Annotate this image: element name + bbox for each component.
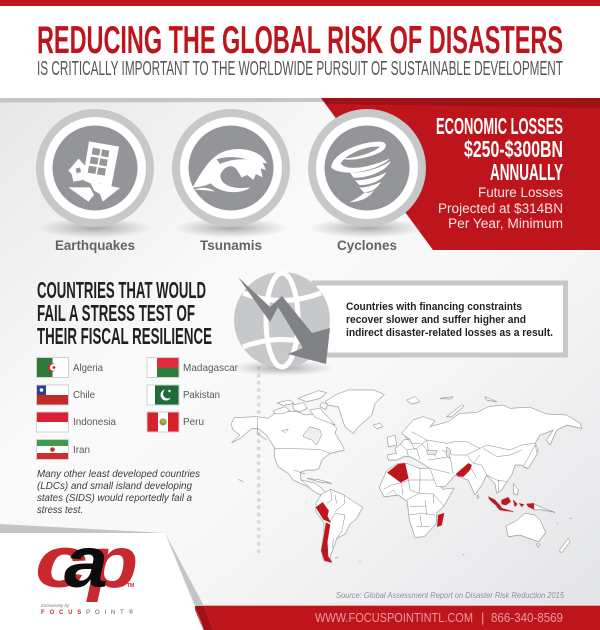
svalbard and russian arctic [407, 397, 497, 417]
dark red band [321, 98, 600, 108]
icon: globe with falling arrow [234, 272, 330, 368]
black and caspian seas [427, 447, 451, 458]
cuba [307, 478, 332, 483]
chile [321, 523, 332, 562]
label: tsunamis: Tsunamis [200, 237, 262, 253]
losses projection text: Future Losses [478, 185, 563, 200]
japan [523, 445, 537, 468]
world map [231, 390, 582, 562]
label: earthquakes: Earthquakes [55, 237, 135, 253]
logo: cap: TM [127, 583, 134, 589]
text: other least developed countries note: Many other least developed countries [37, 468, 201, 480]
south america [316, 489, 363, 562]
madagascar [437, 513, 444, 527]
new zealand [559, 538, 570, 553]
peru [316, 502, 331, 523]
heading: stress test countries: COUNTRIES THAT WOULD [37, 277, 206, 303]
flag: Iran [36, 440, 68, 460]
callout text: Countries with financing constraints [346, 301, 522, 313]
dotted connector line [257, 368, 261, 553]
logo: cap [35, 523, 138, 603]
losses heading [436, 113, 563, 185]
small islands [238, 479, 572, 562]
top red bar [0, 0, 600, 6]
label: Indonesia: Indonesia [73, 416, 116, 428]
logo: cap: a [64, 523, 108, 603]
indonesia [488, 497, 534, 512]
icon: earthquakes [36, 109, 154, 238]
falling arrow [238, 277, 330, 364]
africa [379, 463, 454, 537]
icon: tsunami [172, 109, 290, 238]
losses projection text [438, 185, 563, 231]
losses projection text: Per Year, Minimum [448, 216, 563, 231]
label: cyclones: Cyclones [337, 237, 397, 253]
flag: Algeria [36, 358, 68, 378]
source note: Source: Global Assessment Report on Disaster Risk Reduction 2015 [336, 590, 564, 600]
flag: Madagascar [147, 358, 179, 378]
eurasia borders [400, 432, 535, 492]
iceland [373, 423, 383, 429]
footer divider: | [481, 610, 484, 625]
logo focuspoint: FOCUS POINT® [41, 609, 134, 616]
label: Pakistan: Pakistan [183, 389, 220, 401]
hudson bay [303, 427, 322, 445]
heading: stress test countries: THEIR FISCAL RESILIENCE [37, 323, 212, 349]
text: other least developed countries note: (LDCs) and small island developing [37, 480, 192, 492]
flag: Indonesia [36, 412, 68, 432]
british isles [387, 435, 397, 447]
logo: cap: p [86, 523, 138, 603]
logo tagline: Exclusively by [41, 603, 70, 608]
greenland [325, 390, 384, 433]
label: Peru: Peru [183, 416, 204, 428]
losses projection text: Projected at $314BN [438, 201, 563, 216]
heading: stress test countries [37, 277, 212, 349]
footer phone: 866-340-8569 [491, 610, 563, 625]
canadian arctic islands [273, 391, 335, 433]
footer red band [195, 606, 600, 630]
logo: cap: c [35, 523, 87, 603]
flag: Pakistan [147, 385, 179, 405]
algeria [387, 463, 408, 482]
callout text [346, 301, 553, 339]
shadow under globe [230, 360, 334, 376]
africa borders [383, 469, 444, 527]
flag: Chile [36, 385, 68, 405]
flag: Peru [147, 412, 179, 432]
label: Madagascar: Madagascar [183, 362, 238, 374]
grey header strip [0, 98, 325, 102]
label: Algeria: Algeria [73, 362, 103, 374]
eurasia [387, 405, 582, 495]
philippines [513, 483, 518, 495]
sri lanka [477, 495, 479, 498]
south america borders [327, 489, 345, 548]
australia [506, 513, 546, 542]
text: other least developed countries note [37, 468, 201, 516]
icon: cyclones [308, 109, 426, 238]
north america borders [257, 417, 330, 487]
text: other least developed countries note: states (SIDS) would reportedly fail a [37, 492, 192, 504]
text: other least developed countries note: stress test. [37, 504, 83, 516]
label: Iran: Iran [73, 444, 90, 456]
papua new guinea [534, 504, 555, 512]
callout text: indirect disaster-related losses as a result. [346, 327, 553, 339]
panel: economic losses [321, 98, 600, 250]
footer website: WWW.FOCUSPOINTINTL.COM [315, 610, 473, 625]
north america [231, 412, 344, 495]
pakistan [456, 463, 472, 477]
logo panel [0, 523, 213, 630]
callout: financing constraints [314, 283, 566, 355]
label: Chile: Chile [73, 389, 95, 401]
callout text: recover slower and suffer higher and [346, 314, 526, 326]
tasmania [536, 544, 540, 547]
heading: stress test countries: FAIL A STRESS TEST OF [37, 300, 195, 326]
